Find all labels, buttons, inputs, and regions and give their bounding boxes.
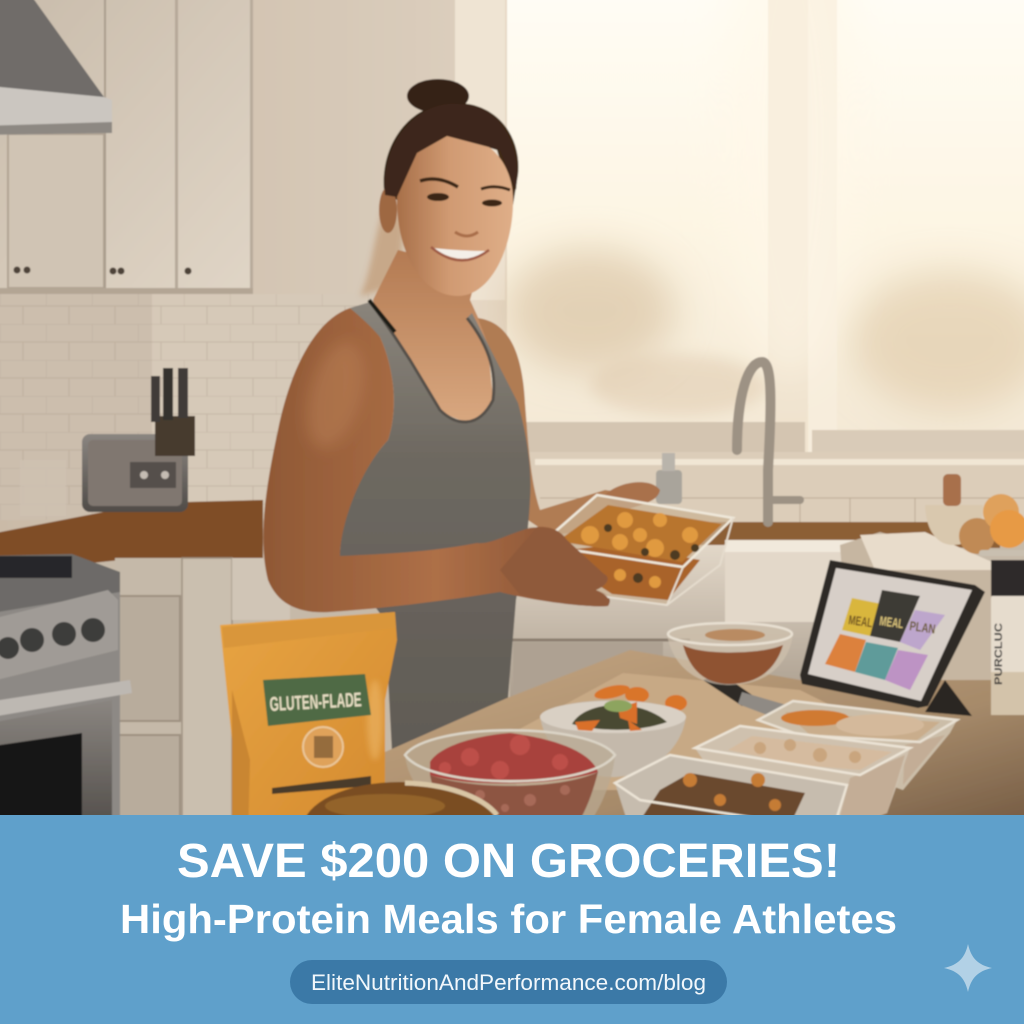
face: [397, 135, 513, 296]
hair and bun: [384, 79, 518, 205]
tank top: [340, 302, 530, 752]
neck and chest: [373, 250, 493, 425]
far hand behind container: [603, 482, 660, 510]
url pill: EliteNutritionAndPerformance.com/blog: [311, 970, 706, 995]
banner subtitle: High-Protein Meals for Female Athletes: [120, 896, 897, 942]
hair top: [385, 104, 517, 197]
bra strap: [369, 300, 395, 332]
knife: [703, 674, 790, 716]
front fingers over container: [500, 527, 609, 606]
shaker bottle: [979, 550, 1024, 715]
near arm: [263, 308, 610, 612]
arm highlight: [306, 344, 362, 446]
window pane left: [505, 0, 770, 422]
cutting board: [490, 673, 860, 790]
glass bowl top right: [667, 622, 793, 685]
bag label text: GLUTEN-FLADE: [269, 689, 362, 716]
bag badge: [303, 727, 343, 767]
kitchen wall: [253, 0, 455, 557]
carrots on board: [593, 682, 687, 711]
table: [385, 650, 1024, 835]
flour bag: [220, 612, 397, 835]
middle meal container: [695, 726, 910, 835]
banner title: SAVE $200 ON GROCERIES!: [177, 835, 840, 888]
loose hair wisps: [360, 214, 404, 297]
bread loaf: [303, 782, 497, 874]
window mullion: [505, 0, 1024, 460]
stove: [0, 554, 132, 835]
smile: [431, 247, 489, 260]
range hood: [0, 0, 112, 135]
url pill: [290, 960, 727, 1004]
canister on counter: [21, 461, 65, 505]
knife block: [151, 368, 195, 456]
left countertop: [0, 499, 264, 564]
white bowl of vegetables: [540, 700, 686, 777]
bag icon strip: [272, 776, 371, 794]
woman: [263, 79, 640, 752]
scene backdrop: [95, 526, 1024, 752]
far shoulder and arm: [478, 318, 618, 534]
tablet: MEAL: [879, 613, 904, 631]
bag label: [263, 674, 371, 726]
right countertop: [640, 522, 1000, 548]
sunlight glow: [768, 0, 810, 368]
subway tile backsplash: [68, 294, 356, 488]
window frame: [454, 0, 506, 326]
tablet: MEAL: [848, 612, 873, 630]
banner panel: [0, 815, 1024, 1024]
ear: [379, 187, 397, 233]
right counter and cabinet: [840, 530, 992, 571]
lower cabinets: [115, 558, 290, 835]
farmhouse sink: [510, 540, 860, 705]
tank neckline trim: [370, 302, 494, 422]
window pane right: [837, 0, 1024, 430]
tablet: PLAN: [909, 618, 936, 637]
glass meal container held: [500, 495, 733, 606]
toaster: [82, 434, 188, 512]
soap bottle: [656, 453, 682, 504]
glass bowl of ground meat: [405, 730, 615, 835]
front meal container: [615, 755, 847, 830]
back meal container: [758, 701, 957, 790]
faucet: [737, 362, 800, 522]
icon: sparkle star: [944, 944, 992, 992]
window sill and backsplash: [520, 452, 1024, 527]
tablet: [800, 560, 985, 716]
shaker bottle: PURCLUC: [993, 623, 1005, 685]
nose: [455, 232, 478, 236]
eyes: [420, 179, 510, 206]
crock and fruit bowl: [925, 474, 1024, 554]
upper cabinets: [0, 0, 253, 294]
